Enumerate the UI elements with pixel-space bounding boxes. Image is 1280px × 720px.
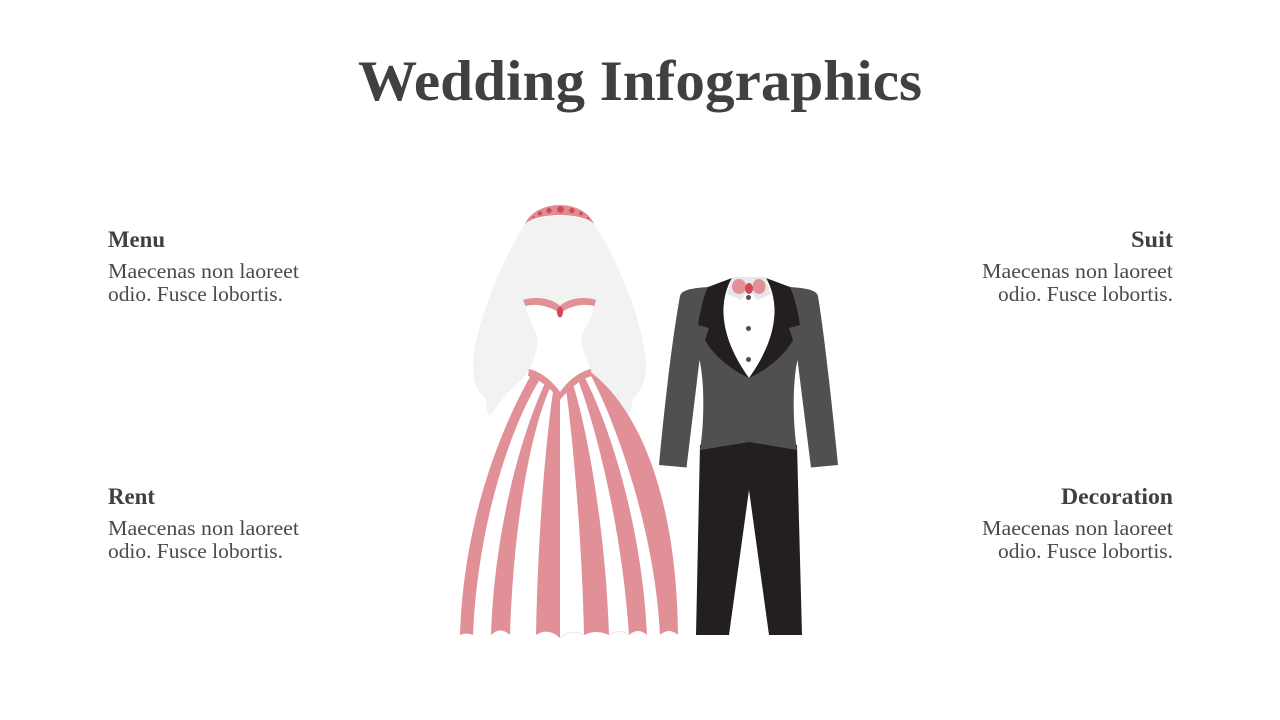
text block: Rent: Rent: [108, 484, 155, 509]
shirt buttons: [746, 295, 751, 362]
text block: Suit: [982, 227, 1173, 306]
text block: Decoration: Decoration: [1061, 484, 1173, 509]
text block: Rent: [108, 484, 299, 563]
trousers: [696, 438, 802, 635]
text block: Decoration: [982, 484, 1173, 563]
title: Wedding Infographics: [358, 50, 922, 113]
text block: Decoration: odio. Fusce lobortis.: [998, 539, 1173, 563]
veil: [473, 216, 646, 415]
text block: Suit: Suit: [1131, 227, 1173, 252]
hem scallops: [560, 632, 629, 638]
text block: Decoration: Maecenas non laoreet: [982, 516, 1173, 540]
text block: Menu: Maecenas non laoreet: [108, 259, 299, 283]
necklace gem: [557, 306, 563, 318]
text block: Rent: Maecenas non laoreet: [108, 516, 299, 540]
text block: Rent: odio. Fusce lobortis.: [108, 539, 283, 563]
text block: Menu: [108, 227, 299, 306]
tiara: [525, 205, 594, 224]
skirt stripes: [460, 373, 678, 638]
bow tie: [732, 279, 766, 294]
shirt: [723, 278, 775, 378]
lapels: [698, 278, 749, 378]
skirt underlay and bodice: [460, 305, 678, 635]
collar: [727, 277, 771, 300]
text block: Suit: odio. Fusce lobortis.: [998, 282, 1173, 306]
icon: tuxedo: [659, 277, 838, 635]
jacket: [659, 287, 838, 468]
text block: Menu: odio. Fusce lobortis.: [108, 282, 283, 306]
icon: wedding dress: [460, 205, 678, 638]
text block: Suit: Maecenas non laoreet: [982, 259, 1173, 283]
text block: Menu: Menu: [108, 227, 165, 252]
neckline trim: [523, 298, 596, 314]
waistband: [528, 369, 592, 400]
